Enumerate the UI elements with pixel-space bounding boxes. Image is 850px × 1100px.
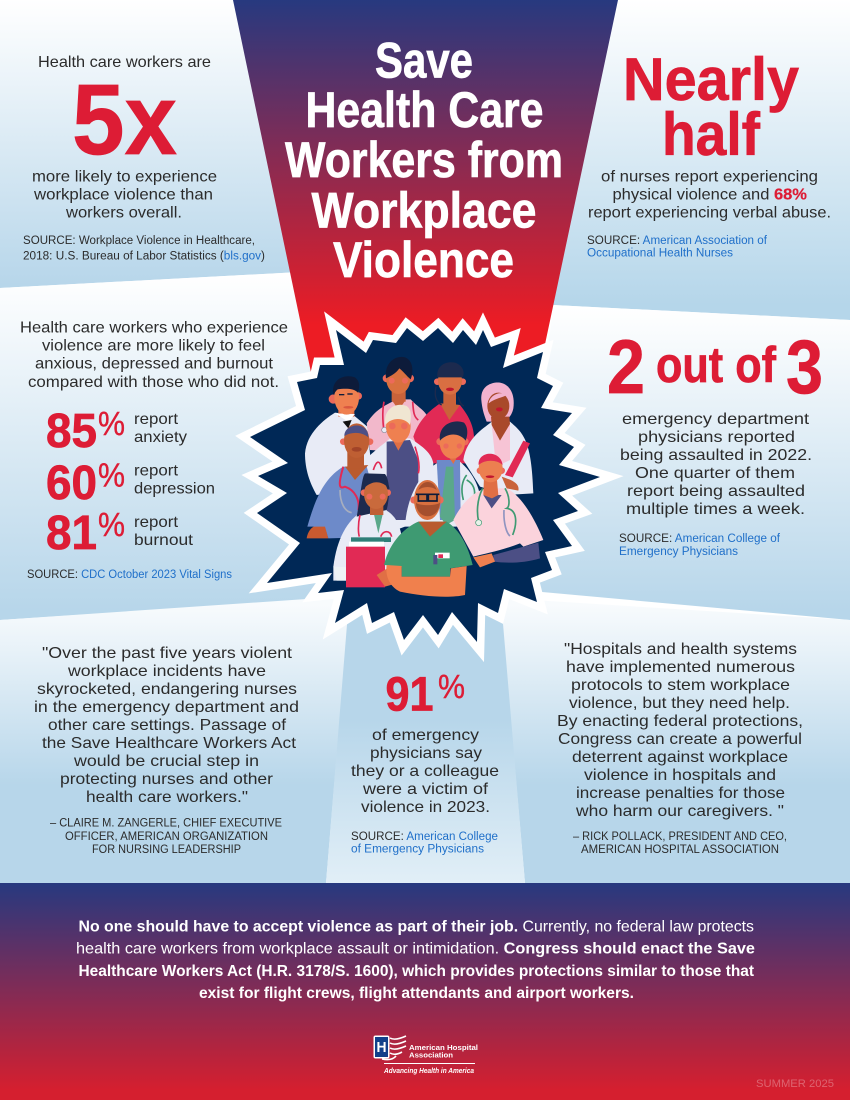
- person: man in blue scrubs: [307, 423, 387, 538]
- quote: Claire Zangerle: [34, 645, 299, 856]
- title: Violence: [333, 232, 514, 288]
- panel: bottom centre background: [326, 600, 525, 883]
- quote: Claire Zangerle: – CLAIRE M. ZANGERLE, CHIEF EXECUTIVE: [50, 818, 282, 830]
- panel: top left background: [0, 0, 300, 288]
- big number: 5x: 5x: [72, 64, 177, 176]
- stat: 60 percent: report: [134, 462, 179, 480]
- stat: 60 percent: 60: [46, 457, 97, 510]
- logo: American Hospital Association: Association: [409, 1050, 453, 1060]
- stat block: 91 percent: SOURCE: American College: [351, 831, 498, 843]
- quote: Rick Pollack: Congress can create a powerful: [558, 731, 802, 748]
- title: [285, 32, 563, 288]
- logo: American Hospital Association: Advancing Health in America: [383, 1066, 474, 1075]
- quote: Rick Pollack: have implemented numerous: [566, 659, 795, 676]
- person: woman with red book: [333, 473, 402, 587]
- illustration: group of health care workers: [305, 357, 543, 597]
- quote: Rick Pollack: deterrent against workplace: [572, 749, 788, 766]
- quote: Claire Zangerle: health care workers.": [86, 789, 248, 806]
- footer call to action: Healthcare Workers Act (H.R. 3178/S. 1600), which provides protections similar to those that: [78, 963, 755, 980]
- stat block: 2 out of 3: physicians reported: [638, 429, 795, 446]
- panel: middle left background: [0, 272, 340, 620]
- quote: Claire Zangerle: would be crucial step in: [73, 753, 259, 770]
- stat: 85 percent: [46, 405, 187, 458]
- person: woman in pink scrubs: [453, 454, 543, 567]
- quote: Rick Pollack: violence in hospitals and: [584, 767, 776, 784]
- stat block: nearly half: SOURCE: American Association of: [587, 235, 768, 247]
- stat block: 2 out of 3: SOURCE: American College of: [619, 533, 781, 545]
- footer call to action: [76, 918, 755, 1002]
- quote: Rick Pollack: By enacting federal protections,: [557, 713, 803, 730]
- stat block: 5x: 2018: U.S. Bureau of Labor Statistics ( bls.gov): [23, 250, 265, 262]
- logo: American Hospital Association: American Hospital: [409, 1043, 478, 1052]
- footer call to action: No one should have to accept violence as part of their job. Currently, no federal law protects: [78, 918, 754, 936]
- stat block: anxiety, depression, burnout: compared with those who did not.: [28, 374, 279, 391]
- stat block: 2 out of 3: multiple times a week.: [626, 501, 805, 518]
- stat: 60 percent: depression: [134, 480, 215, 498]
- stat block: anxiety, depression, burnout: [20, 320, 288, 581]
- stat: 85 percent: %: [98, 405, 125, 442]
- stat: 60 percent: %: [98, 456, 125, 494]
- stat: 81 percent: %: [98, 506, 125, 543]
- quote: Claire Zangerle: the Save Healthcare Workers Act: [42, 735, 297, 752]
- quote: Rick Pollack: [557, 641, 803, 856]
- stat block: 5x: [23, 54, 265, 262]
- edition label: SUMMER 2025: [756, 1078, 834, 1090]
- stat block: 2 out of 3: 3: [786, 325, 823, 410]
- quote: Claire Zangerle: protecting nurses and other: [60, 771, 274, 788]
- stat: 81 percent: 81: [46, 507, 97, 560]
- stat block: 5x: workplace violence than: [33, 186, 213, 204]
- stat block: nearly half: report experiencing verbal abuse.: [588, 204, 831, 222]
- title: Workplace: [312, 182, 536, 238]
- person: front man in green scrubs: [384, 480, 473, 597]
- stat block: nearly half: [587, 46, 831, 260]
- quote: Claire Zangerle: FOR NURSING LEADERSHIP: [92, 844, 241, 856]
- quote: Claire Zangerle: "Over the past five years violent: [42, 645, 293, 662]
- stat block: nearly half: of nurses report experiencing: [601, 168, 818, 186]
- stat block: nearly half: half: [662, 101, 761, 168]
- starburst: [250, 328, 600, 642]
- stat block: 2 out of 3: out of: [656, 337, 776, 393]
- stat: 81 percent: burnout: [134, 532, 194, 549]
- stat block: 91 percent: of Emergency Physicians: [351, 844, 484, 856]
- stat block: 91 percent: physicians say: [370, 745, 482, 762]
- quote: Rick Pollack: violence, but they need help.: [569, 695, 790, 712]
- quote: Rick Pollack: "Hospitals and health systems: [564, 641, 797, 658]
- stat block: 91 percent: 91: [386, 668, 434, 722]
- footer band: [0, 883, 850, 1100]
- quote: Rick Pollack: who harm our caregivers. ": [575, 803, 784, 820]
- stat block: anxiety, depression, burnout: anxious, depressed and burnout: [35, 356, 274, 372]
- stat block: 91 percent: [351, 668, 499, 856]
- stat block: 91 percent: they or a colleague: [351, 763, 499, 780]
- panel: top right background: [553, 0, 850, 320]
- person: woman with pink hair and clipboard: [463, 383, 533, 495]
- title banner: [233, 0, 618, 382]
- stat: 85 percent: report: [134, 411, 179, 428]
- title: Save: [375, 32, 473, 88]
- quote: Rick Pollack: – RICK POLLACK, PRESIDENT AND CEO,: [573, 831, 787, 843]
- person: woman in red scrubs: [413, 362, 474, 463]
- stat block: 2 out of 3: report being assaulted: [627, 483, 805, 500]
- quote: Claire Zangerle: skyrocketed, endangering nurses: [37, 681, 297, 698]
- quote: Rick Pollack: AMERICAN HOSPITAL ASSOCIATION: [581, 844, 779, 856]
- logo: American Hospital Association: [374, 1036, 478, 1075]
- quote: Claire Zangerle: other care settings. Passage of: [48, 717, 287, 734]
- logo: American Hospital Association: H: [376, 1039, 386, 1056]
- stat block: nearly half: Nearly: [623, 46, 800, 113]
- stat block: 5x: workers overall.: [65, 204, 182, 222]
- panel: bottom left background: [0, 596, 350, 883]
- quote: Claire Zangerle: OFFICER, AMERICAN ORGANIZATION: [65, 831, 268, 843]
- quote: Claire Zangerle: in the emergency department and: [34, 699, 299, 716]
- stat block: 2 out of 3: 2: [607, 325, 645, 410]
- footer call to action: health care workers from workplace assault or intimidation. Congress should enact the Save: [76, 940, 755, 958]
- stat: 85 percent: 85: [46, 405, 97, 458]
- stat block: 91 percent: of emergency: [372, 727, 479, 744]
- stat block: nearly half: physical violence and 68%: [612, 186, 807, 204]
- quote: Claire Zangerle: workplace incidents have: [67, 663, 266, 680]
- stat block: 5x: SOURCE: Workplace Violence in Healthcare,: [23, 235, 255, 247]
- panel: bottom right background: [500, 598, 850, 883]
- stat block: anxiety, depression, burnout: SOURCE: CDC October 2023 Vital Signs: [27, 569, 232, 581]
- stat block: 91 percent: were a victim of: [362, 781, 489, 798]
- stat block: 2 out of 3: emergency department: [622, 411, 810, 428]
- person: man in white coat: [305, 376, 373, 495]
- stat: 85 percent: anxiety: [134, 429, 187, 446]
- stat block: anxiety, depression, burnout: Health care workers who experience: [20, 320, 288, 336]
- stat block: 91 percent: violence in 2023.: [361, 799, 490, 816]
- person: grey haired doctor: [365, 405, 433, 533]
- stat: 81 percent: [46, 506, 194, 560]
- stat block: 2 out of 3: being assaulted in 2022.: [620, 447, 812, 464]
- title: Health Care: [306, 82, 544, 138]
- footer call to action: exist for flight crews, flight attendants and airport workers.: [199, 985, 634, 1002]
- stat block: nearly half: Occupational Health Nurses: [587, 248, 733, 260]
- stat block: 2 out of 3: Emergency Physicians: [619, 546, 738, 558]
- quote: Rick Pollack: protocols to stem workplace: [571, 677, 790, 694]
- quote: Rick Pollack: increase penalties for those: [576, 785, 785, 802]
- person: woman in pink coat: [367, 357, 427, 453]
- stat block: 2 out of 3: [607, 325, 823, 558]
- stat block: 5x: Health care workers are: [38, 54, 211, 71]
- stat block: 5x: more likely to experience: [32, 168, 217, 186]
- stat: 60 percent: [46, 456, 215, 510]
- panel: middle right background: [520, 305, 850, 620]
- title: Workers from: [285, 132, 563, 188]
- stat block: 91 percent: %: [438, 668, 465, 705]
- stat: 81 percent: report: [134, 514, 179, 531]
- stat block: 2 out of 3: One quarter of them: [635, 465, 795, 482]
- stat block: anxiety, depression, burnout: violence are more likely to feel: [42, 338, 265, 354]
- person: man with green tie: [405, 421, 482, 527]
